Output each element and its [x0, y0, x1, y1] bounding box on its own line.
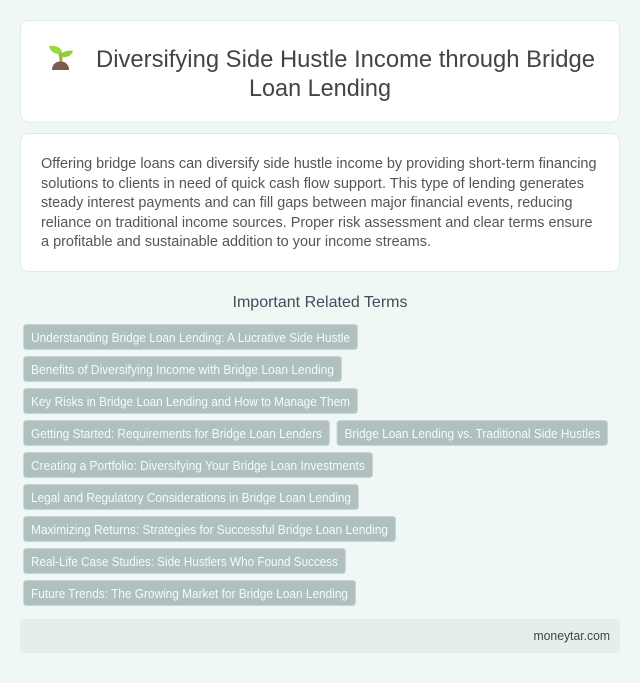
- footer bar: [20, 619, 620, 653]
- chip: case studies: Real-Life Case Studies: Side Hustlers Who Found Success: [31, 554, 338, 569]
- chip: getting started: Getting Started: Requirements for Bridge Loan Lenders: [31, 426, 322, 441]
- chip: portfolio: [24, 452, 372, 478]
- chip: benefits: [24, 356, 342, 382]
- chip: legal: [24, 484, 358, 510]
- chip: future trends: [24, 580, 356, 606]
- chip: future trends: Future Trends: The Growing Market for Bridge Loan Lending: [31, 586, 348, 601]
- description text: a profitable and sustainable addition to your income streams.: [41, 234, 431, 250]
- chip: versus traditional: Bridge Loan Lending vs. Traditional Side Hustles: [344, 426, 600, 441]
- chip: benefits: Benefits of Diversifying Income with Bridge Loan Lending: [31, 362, 334, 377]
- description text: steady interest payments and can fill gaps between major financial events, reducing: [41, 195, 572, 211]
- description text: Offering bridge loans can diversify side hustle income by providing short-term financing: [41, 156, 596, 172]
- chip: maximizing: [24, 516, 396, 542]
- heading: important related terms: Important Related Terms: [232, 294, 408, 311]
- title: [96, 46, 595, 102]
- panel: description: [20, 134, 620, 272]
- chip: getting started: [24, 420, 330, 446]
- panel: related terms chips: [24, 324, 608, 606]
- chip: portfolio: Creating a Portfolio: Diversifying Your Bridge Loan Investments: [31, 458, 365, 473]
- chip: versus traditional: [337, 420, 608, 446]
- chip: maximizing: Maximizing Returns: Strategies for Successful Bridge Loan Lending: [31, 522, 388, 537]
- title: Loan Lending: [249, 75, 391, 102]
- chip: legal: Legal and Regulatory Considerations in Bridge Loan Lending: [31, 490, 351, 505]
- footer source text: moneytar.com: [534, 628, 610, 643]
- chip: key risks: [24, 388, 358, 414]
- panel: title header: [20, 20, 620, 122]
- description text: solutions to clients in need of quick cash flow support. This type of lending generates: [41, 176, 584, 192]
- chip: case studies: [24, 548, 346, 574]
- icon: seedling: [49, 46, 73, 70]
- description text: [41, 156, 596, 250]
- title: Diversifying Side Hustle Income through Bridge: [96, 46, 595, 73]
- chip: understanding: Understanding Bridge Loan Lending: A Lucrative Side Hustle: [31, 330, 350, 345]
- chip: understanding: [24, 324, 358, 350]
- chip: key risks: Key Risks in Bridge Loan Lending and How to Manage Them: [31, 394, 350, 409]
- description text: reliance on traditional income sources. Proper risk assessment and clear terms ensure: [41, 215, 592, 231]
